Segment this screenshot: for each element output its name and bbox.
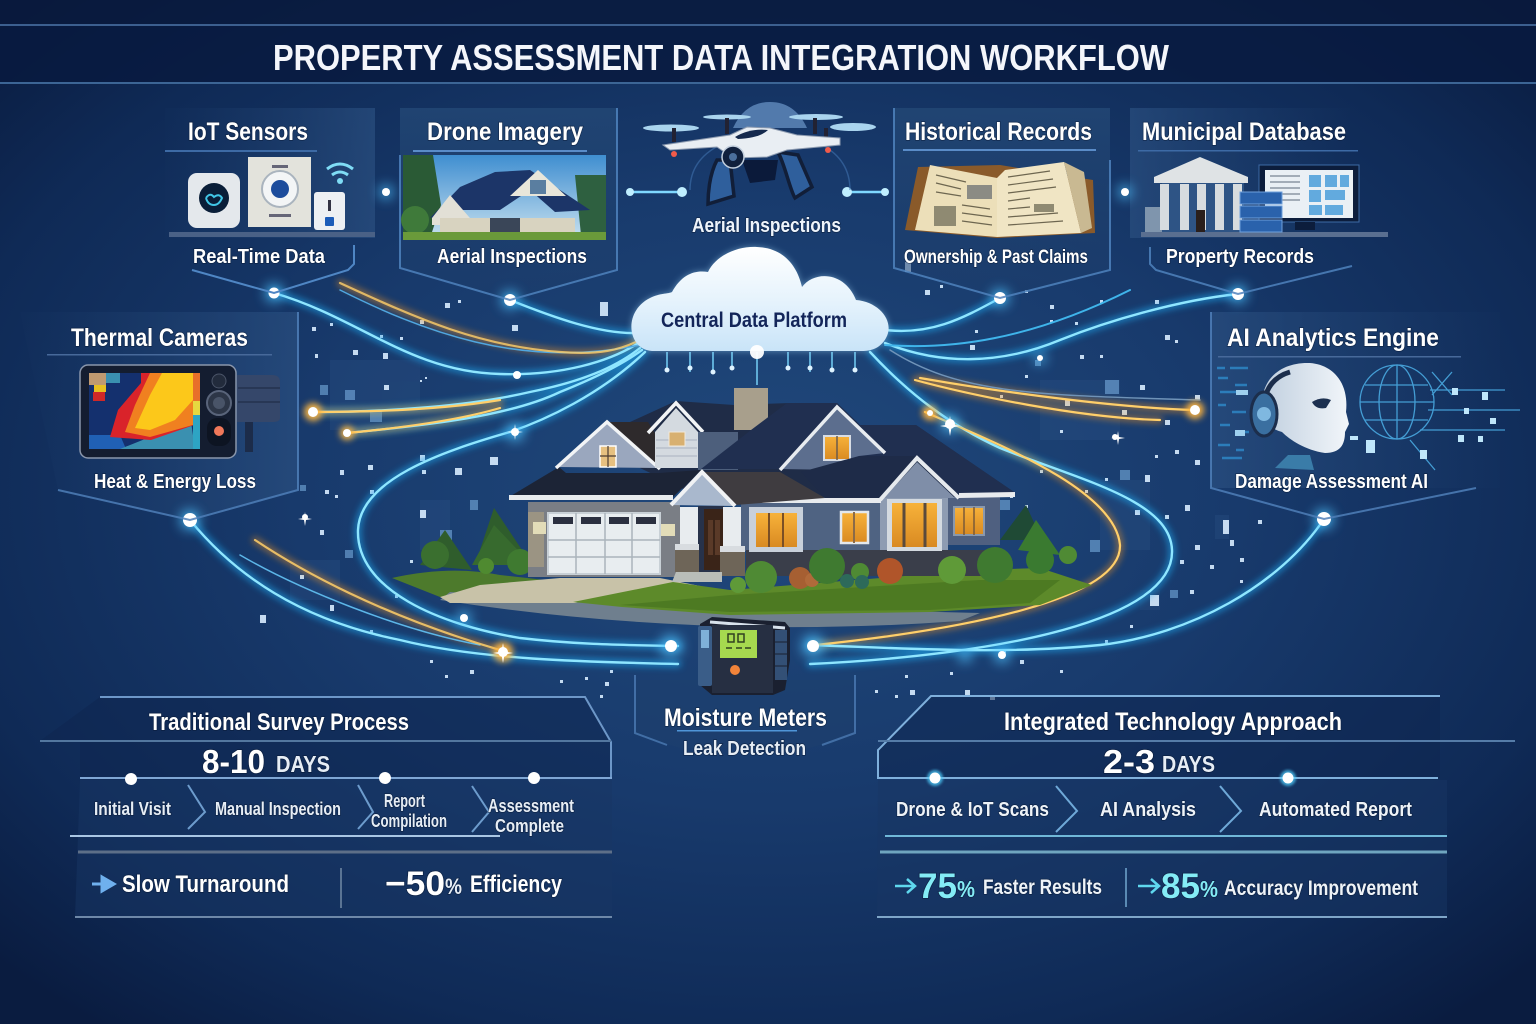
chimney <box>734 388 768 430</box>
left gable <box>556 422 676 469</box>
icon: drone <box>643 114 876 204</box>
duration <box>1103 743 1215 780</box>
duration: DAYS <box>1162 751 1215 777</box>
icon: IoT devices <box>169 157 375 237</box>
steps <box>94 791 574 836</box>
title: PROPERTY ASSESSMENT DATA INTEGRATION WORKFLOW <box>273 37 1169 78</box>
panel: Municipal Database <box>1138 118 1388 294</box>
upper dormer <box>648 403 738 470</box>
main roof <box>701 403 1014 497</box>
label: Aerial Inspections: Aerial Inspections <box>692 215 841 237</box>
icon: AI head and neural globe <box>1217 363 1520 470</box>
right upper gable <box>780 407 885 470</box>
cloud connector ticks <box>664 352 858 385</box>
icon: moisture meter <box>698 617 790 695</box>
steps: Assessment <box>488 796 574 816</box>
efficiency stat: Efficiency <box>470 871 563 898</box>
connector lines <box>626 187 889 197</box>
connection flow lines <box>190 283 1324 664</box>
heading: Moisture Meters: Moisture Meters <box>664 704 827 732</box>
drone with aerial inspections label <box>626 102 889 237</box>
step chevrons <box>188 785 489 832</box>
right gable <box>884 462 955 498</box>
efficiency stat: −50 <box>385 865 445 903</box>
wall right <box>741 497 1001 576</box>
efficiency stat <box>385 865 563 903</box>
heading: IoT Sensors: IoT Sensors <box>188 118 308 146</box>
shrubs <box>730 505 1077 593</box>
panel: Integrated Technology Approach <box>877 696 1515 917</box>
illustration: house <box>392 388 1092 627</box>
panel: Drone Imagery <box>400 108 617 300</box>
duration <box>202 743 330 780</box>
trees and shrubs left <box>420 508 533 575</box>
title band <box>0 0 1536 84</box>
heading: Drone Imagery: Drone Imagery <box>427 118 583 146</box>
steps: AI Analysis <box>1100 799 1196 821</box>
slow turnaround: Slow Turnaround <box>122 871 289 898</box>
heading: Municipal Database: Municipal Database <box>1142 118 1346 146</box>
label: Aerial Inspections: Aerial Inspections <box>437 246 587 268</box>
stat: faster results: % <box>957 876 975 902</box>
steps: Compilation <box>371 811 447 831</box>
duration: 2-3 <box>1103 743 1155 780</box>
heading: Integrated Technology Approach <box>1004 708 1342 736</box>
timeline dots <box>125 772 540 785</box>
extra sparkle stars <box>298 416 1125 663</box>
icon: thermal camera <box>80 365 280 458</box>
stat: accuracy improvement: Accuracy Improvement <box>1224 877 1418 900</box>
duration: 8-10 <box>202 743 265 780</box>
stat: faster results <box>895 867 1102 906</box>
wall left and garage <box>528 502 680 577</box>
stat: accuracy improvement: 85 <box>1161 867 1200 906</box>
porch and door <box>672 506 745 582</box>
steps: Drone & IoT Scans <box>896 799 1049 821</box>
panel: IoT Sensors <box>165 118 375 293</box>
icon: municipal building and monitor <box>1141 157 1388 237</box>
left lower roof <box>509 467 701 497</box>
label: Heat & Energy Loss: Heat & Energy Loss <box>94 471 256 493</box>
heading: AI Analytics Engine: AI Analytics Engine <box>1227 324 1439 352</box>
label: Ownership & Past Claims: Ownership & Past Claims <box>904 246 1088 268</box>
heading: Traditional Survey Process <box>149 709 409 736</box>
stat: faster results: Faster Results <box>983 876 1102 899</box>
label: Real-Time Data: Real-Time Data <box>193 246 326 268</box>
right lower roof <box>801 456 917 498</box>
label: Property Records: Property Records <box>1166 246 1314 268</box>
timeline dots <box>927 770 1296 786</box>
roof back <box>630 401 1014 497</box>
steps <box>896 799 1412 821</box>
cloud shape <box>631 247 889 351</box>
steps: Manual Inspection <box>215 798 341 819</box>
faint background city blocks <box>290 360 1229 610</box>
stat: accuracy improvement: % <box>1200 876 1218 902</box>
icon: open book <box>905 162 1095 238</box>
steps: Complete <box>495 816 564 836</box>
panel rules <box>877 696 1515 917</box>
central data platform cloud <box>631 247 889 385</box>
efficiency stat: % <box>445 874 462 899</box>
panel: Thermal Cameras <box>47 312 298 520</box>
label: Leak Detection: Leak Detection <box>683 738 806 760</box>
panel backgrounds <box>20 108 1500 917</box>
heading: Historical Records: Historical Records <box>905 118 1092 146</box>
arrow <box>92 877 114 891</box>
panel: Moisture Meters <box>635 617 855 760</box>
duration: DAYS <box>276 751 330 777</box>
glowing nodes <box>180 185 1334 663</box>
heading: Thermal Cameras: Thermal Cameras <box>71 324 248 352</box>
steps: Initial Visit <box>94 798 171 819</box>
image: aerial house photo <box>401 155 606 240</box>
steps: Automated Report <box>1259 799 1412 821</box>
step chevrons <box>1056 786 1241 832</box>
label: Central Data Platform: Central Data Platform <box>661 309 847 332</box>
label: Damage Assessment AI: Damage Assessment AI <box>1235 471 1428 493</box>
center porch roof <box>703 472 825 505</box>
panel rules <box>40 697 612 917</box>
stat: accuracy improvement <box>1138 867 1418 906</box>
panel: Traditional Survey Process <box>40 697 612 917</box>
panel: AI Analytics Engine <box>1211 312 1520 519</box>
lit windows <box>749 499 984 552</box>
particle field <box>260 262 1262 700</box>
ground <box>392 568 1092 627</box>
steps: Report <box>384 791 425 811</box>
stat: faster results: 75 <box>918 867 957 906</box>
panel: Historical Records <box>894 108 1110 298</box>
